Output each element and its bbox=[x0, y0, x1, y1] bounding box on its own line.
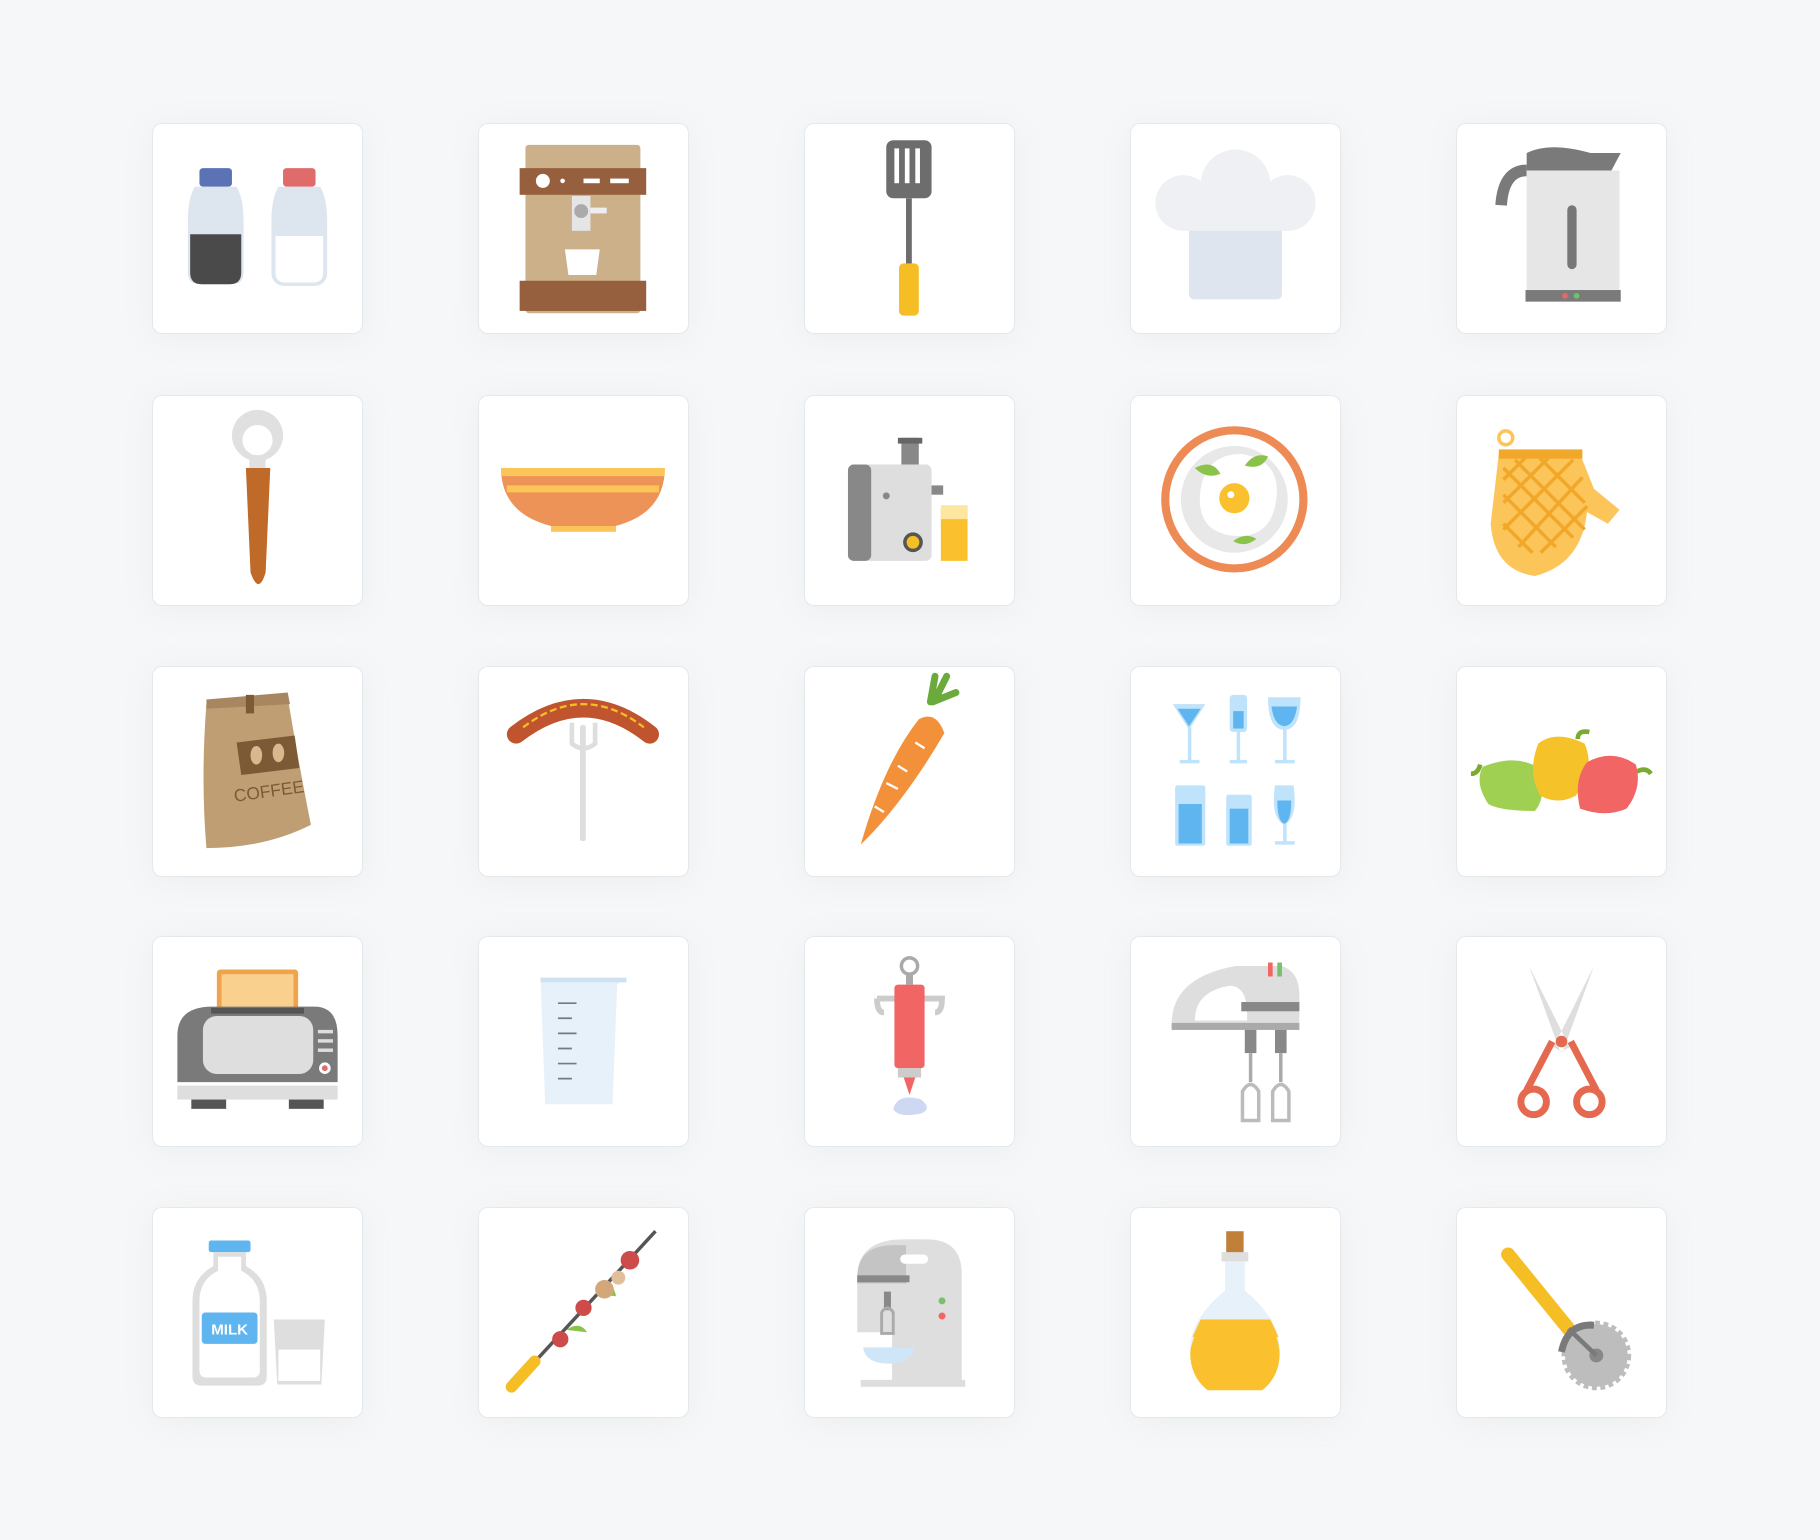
card: oil bottle bbox=[1131, 1208, 1340, 1417]
card: espresso machine bbox=[479, 124, 688, 333]
card: bell peppers bbox=[1457, 667, 1666, 876]
card: milk bottle and glass bbox=[153, 1208, 362, 1417]
card: salt and pepper shakers bbox=[153, 124, 362, 333]
card: bottle opener bbox=[153, 396, 362, 605]
card: chef hat bbox=[1131, 124, 1340, 333]
card: coffee bag bbox=[153, 667, 362, 876]
card: hand mixer bbox=[1131, 937, 1340, 1146]
card: juicer bbox=[805, 396, 1014, 605]
card: oven mitt bbox=[1457, 396, 1666, 605]
card: kebab skewer bbox=[479, 1208, 688, 1417]
card: stand mixer bbox=[805, 1208, 1014, 1417]
card: carrot bbox=[805, 667, 1014, 876]
card: coffee bag: COFFEE bbox=[233, 776, 305, 806]
card: scissors bbox=[1457, 937, 1666, 1146]
card: measuring cup bbox=[479, 937, 688, 1146]
card: baster bbox=[805, 937, 1014, 1146]
card: toaster bbox=[153, 937, 362, 1146]
card: electric kettle bbox=[1457, 124, 1666, 333]
card: milk bottle and glass: MILK bbox=[211, 1322, 248, 1339]
card: sausage on fork bbox=[479, 667, 688, 876]
card: bowl bbox=[479, 396, 688, 605]
card: plate with fried egg bbox=[1131, 396, 1340, 605]
card: pizza cutter bbox=[1457, 1208, 1666, 1417]
card: glasses bbox=[1131, 667, 1340, 876]
card: spatula bbox=[805, 124, 1014, 333]
